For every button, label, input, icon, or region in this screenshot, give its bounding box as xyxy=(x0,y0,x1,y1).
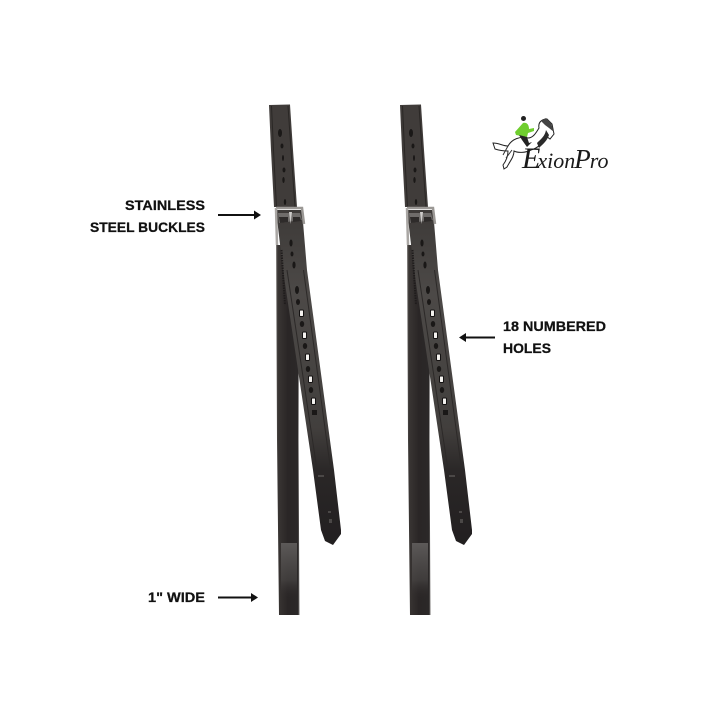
left stirrup leather xyxy=(269,104,341,615)
label: stainless steel buckles: STEEL BUCKLES xyxy=(90,220,205,235)
label: stainless steel buckles xyxy=(90,198,205,235)
arrow: to strap width xyxy=(218,593,258,602)
right stirrup leather xyxy=(400,104,472,615)
icon: jumping horse and rider xyxy=(493,116,554,169)
label: 1 inch wide: 1" WIDE xyxy=(148,590,205,605)
logo: ExionPro xyxy=(493,116,608,175)
arrow: to holes xyxy=(459,333,495,342)
label: stainless steel buckles: STAINLESS xyxy=(125,198,205,213)
label: 18 numbered holes xyxy=(503,319,606,356)
label: 18 numbered holes: 18 NUMBERED xyxy=(503,319,606,334)
label: 18 numbered holes: HOLES xyxy=(503,341,551,356)
arrow: to buckle xyxy=(218,210,261,220)
logo wordmark: ExionPro xyxy=(521,142,608,175)
